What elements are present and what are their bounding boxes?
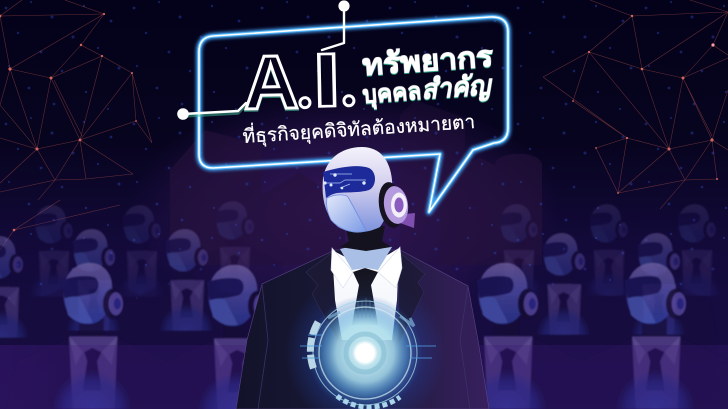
sleeve seams (258, 284, 470, 409)
head shell (323, 147, 392, 232)
collar (331, 247, 402, 288)
neck (340, 226, 391, 251)
jacket chest light (285, 273, 445, 409)
network nodes: right (572, 15, 718, 194)
speech bubble (199, 17, 508, 212)
shirt (332, 248, 399, 340)
visor (323, 166, 375, 198)
A.I. logotype: A (243, 40, 299, 126)
middle row robots (0, 229, 719, 409)
robot head (323, 147, 415, 232)
icon: left node (177, 108, 189, 120)
network lines: right (543, 0, 728, 209)
icon: top node (338, 0, 350, 12)
heading: ทรัพยากร: ทรัพยากร (361, 41, 495, 82)
A.I. logotype (243, 37, 354, 127)
earpiece (376, 181, 415, 229)
network lines: left (0, 0, 152, 250)
suit jacket (236, 250, 489, 409)
mask plate (327, 195, 366, 232)
tie (352, 268, 378, 325)
A.I. logotype: A (243, 41, 299, 127)
network nodes: left (0, 13, 137, 231)
heading: บุคคลสำคัญ: บุคคลสำคัญ (361, 70, 494, 111)
back row robots (0, 201, 728, 364)
front row robots (6, 263, 728, 409)
chest glow (300, 295, 436, 409)
subheading: ที่ธุรกิจยุคดิจิทัลต้องหมายตา (242, 108, 476, 149)
central purple haze (130, 90, 560, 330)
city buildings silhouette (170, 100, 542, 265)
A.I. logotype: I (312, 38, 342, 123)
jacket lapels (306, 252, 425, 345)
collar shadow (340, 245, 392, 270)
dotted particle field (0, 0, 728, 300)
main robot figure (236, 147, 489, 409)
lower purple band (0, 345, 728, 409)
circuit lines (177, 0, 350, 120)
